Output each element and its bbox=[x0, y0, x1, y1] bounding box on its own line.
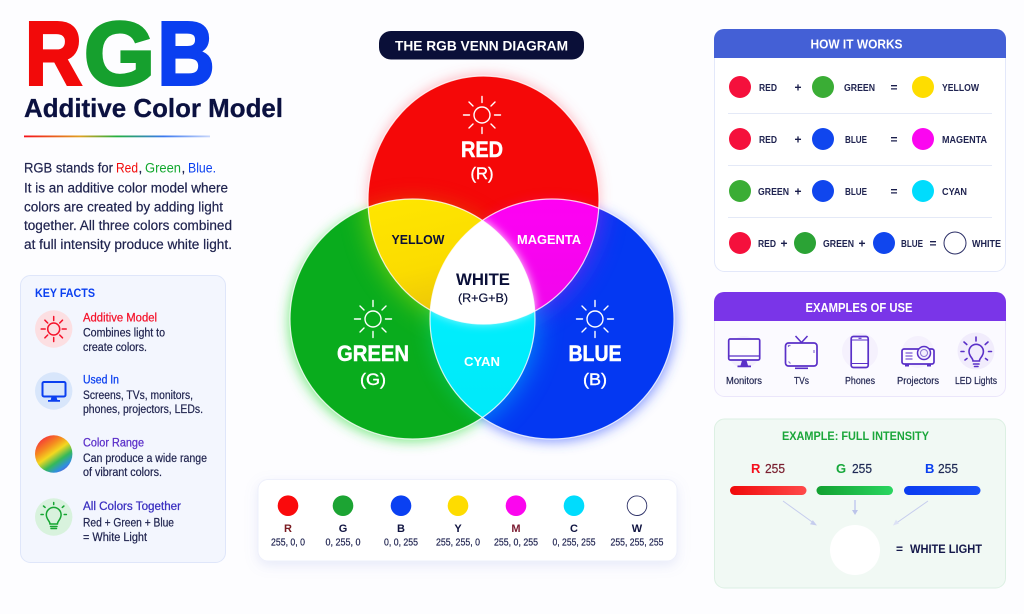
value: red 255 bbox=[751, 461, 785, 476]
row: red plus green: YELLOW bbox=[942, 82, 979, 94]
icon: sun red bbox=[464, 96, 500, 134]
label: red: RED bbox=[461, 137, 503, 162]
row: red plus blue: + bbox=[794, 132, 802, 146]
bar: green bbox=[816, 486, 893, 495]
panel: key facts bbox=[20, 276, 226, 562]
panel: examples of use bbox=[714, 292, 1006, 396]
row: red plus green: RED bbox=[759, 82, 777, 94]
bar: blue bbox=[904, 486, 980, 495]
label: green bbox=[337, 341, 409, 389]
arrows to white light bbox=[783, 500, 928, 526]
fact: all colors together: = White Light bbox=[83, 532, 148, 544]
label: red: (R) bbox=[470, 164, 494, 183]
row: red plus green plus blue: BLUE bbox=[901, 238, 923, 250]
example: monitors: Monitors bbox=[726, 375, 762, 387]
overlap: white bbox=[430, 221, 534, 324]
panel: example full intensity bbox=[714, 419, 1006, 588]
fact: used in bbox=[35, 372, 203, 416]
subtitle: Additive Color Model bbox=[24, 93, 283, 123]
label: magenta: MAGENTA bbox=[517, 233, 581, 247]
legend: blue bbox=[384, 495, 418, 548]
fact: additive model: create colors. bbox=[83, 342, 147, 354]
label: green: GREEN bbox=[337, 341, 409, 366]
bar: red bbox=[730, 486, 806, 495]
icon: sun blue bbox=[576, 300, 614, 338]
header: how it works bbox=[714, 29, 1006, 58]
label: white light: = bbox=[896, 542, 903, 556]
row: red plus green plus blue: GREEN bbox=[823, 238, 854, 250]
intro text block: colors are created by adding light bbox=[24, 200, 223, 214]
fact: all colors together bbox=[35, 498, 181, 544]
circle: red bbox=[368, 76, 599, 310]
legend: cyan: C bbox=[570, 523, 578, 535]
row: red plus green: + bbox=[794, 80, 802, 94]
heading: venn diagram pill bbox=[379, 31, 584, 60]
example: LED lights: LED Lights bbox=[955, 375, 997, 387]
legend: green: G bbox=[339, 523, 347, 535]
label: white bbox=[456, 271, 510, 305]
legend: blue: 0, 0, 255 bbox=[384, 538, 418, 548]
title: RGB: B bbox=[158, 4, 214, 104]
example: projectors: Projectors bbox=[897, 375, 939, 387]
value: red 255: 255 bbox=[765, 462, 785, 476]
label: green: (G) bbox=[360, 370, 386, 389]
legend: yellow: 255, 255, 0 bbox=[436, 538, 480, 548]
row: green plus blue bbox=[729, 180, 967, 202]
heading: venn diagram pill: THE RGB VENN DIAGRAM bbox=[395, 38, 568, 54]
header: examples of use bbox=[714, 292, 1006, 321]
label: blue: BLUE bbox=[568, 341, 622, 366]
row: green plus blue: = bbox=[890, 184, 898, 198]
value: blue 255 bbox=[925, 461, 958, 476]
legend: red bbox=[271, 495, 305, 548]
panel: color value legend bbox=[258, 480, 677, 561]
heading: full intensity: EXAMPLE: FULL INTENSITY bbox=[782, 429, 929, 443]
value: green 255 bbox=[836, 461, 872, 476]
row: red plus green: GREEN bbox=[844, 82, 875, 94]
legend: white bbox=[610, 496, 664, 548]
row: green plus blue: CYAN bbox=[942, 186, 967, 198]
value: green 255: G bbox=[836, 461, 846, 476]
title: RGB: G bbox=[84, 4, 155, 104]
label: white light: WHITE LIGHT bbox=[910, 542, 983, 556]
fact: additive model: Combines light to bbox=[83, 328, 165, 340]
legend: white: W bbox=[632, 523, 643, 535]
intro text block: together. All three colors combined bbox=[24, 218, 232, 233]
row: red plus blue: = bbox=[890, 132, 898, 146]
legend: red: 255, 0, 0 bbox=[271, 538, 305, 548]
overlap: yellow bbox=[368, 199, 482, 310]
fact: all colors together: Red + Green + Blue bbox=[83, 518, 174, 530]
legend: white: 255, 255, 255 bbox=[610, 538, 664, 548]
venn diagram bbox=[280, 70, 680, 450]
row: green plus blue: + bbox=[794, 184, 802, 198]
row: red plus green plus blue bbox=[729, 232, 1001, 254]
value: green 255: 255 bbox=[852, 462, 872, 476]
fact: color range bbox=[35, 435, 207, 479]
header: examples of use: EXAMPLES OF USE bbox=[806, 300, 913, 315]
fact: used in: phones, projectors, LEDs. bbox=[83, 404, 203, 416]
fact: all colors together: All Colors Together bbox=[83, 501, 181, 513]
legend: blue: B bbox=[397, 523, 405, 535]
circle: blue bbox=[430, 208, 674, 439]
intro text block: , bbox=[182, 161, 185, 176]
legend: cyan bbox=[552, 495, 596, 548]
intro text block: Green bbox=[145, 161, 181, 176]
intro text block bbox=[24, 161, 232, 252]
circle: green bbox=[290, 208, 482, 439]
intro text block: It is an additive color model where bbox=[24, 180, 228, 196]
intro text block: Red bbox=[116, 161, 138, 176]
row: red plus green bbox=[729, 76, 979, 98]
fact: color range: Can produce a wide range bbox=[83, 453, 207, 465]
overlap: cyan bbox=[430, 270, 535, 417]
row: red plus blue: MAGENTA bbox=[942, 134, 987, 146]
row: red plus blue bbox=[729, 128, 987, 150]
legend: yellow bbox=[436, 495, 480, 548]
row: red plus green: = bbox=[890, 80, 898, 94]
legend: magenta: 255, 0, 255 bbox=[494, 538, 538, 548]
heading: key facts: KEY FACTS bbox=[35, 286, 95, 300]
title: RGB: R bbox=[25, 4, 82, 104]
overlap: magenta bbox=[445, 199, 599, 311]
row: red plus green plus blue: = bbox=[929, 236, 937, 250]
fact: color range: Color Range bbox=[83, 438, 144, 450]
example: TVs: TVs bbox=[794, 375, 809, 387]
example: monitors bbox=[726, 336, 762, 387]
row: red plus green plus blue: WHITE bbox=[972, 238, 1001, 250]
fact: additive model: Additive Model bbox=[83, 313, 157, 325]
legend: red: R bbox=[284, 523, 292, 535]
example: TVs bbox=[786, 336, 817, 387]
legend: green bbox=[326, 495, 361, 548]
intro text block: Blue. bbox=[188, 161, 216, 176]
row: red plus blue: RED bbox=[759, 134, 777, 146]
label: cyan: CYAN bbox=[464, 355, 500, 369]
fact: color range: of vibrant colors. bbox=[83, 467, 162, 479]
legend: yellow: Y bbox=[454, 523, 462, 535]
row: green plus blue: GREEN bbox=[758, 186, 789, 198]
intro text block: , bbox=[138, 161, 142, 176]
fact: used in: Screens, TVs, monitors, bbox=[83, 390, 193, 402]
example: phones: Phones bbox=[845, 375, 875, 387]
header: how it works: HOW IT WORKS bbox=[810, 37, 902, 51]
example: phones bbox=[842, 333, 878, 387]
label: white: WHITE bbox=[456, 271, 510, 289]
label: white: (R+G+B) bbox=[458, 291, 508, 305]
example: projectors bbox=[897, 336, 939, 387]
label: blue bbox=[568, 341, 622, 389]
legend: magenta: M bbox=[511, 523, 521, 535]
title: RGB bbox=[25, 4, 214, 104]
label: blue: (B) bbox=[583, 370, 607, 389]
row: red plus blue: BLUE bbox=[845, 134, 867, 146]
row: red plus green plus blue: + bbox=[858, 236, 866, 250]
intro text block: RGB stands for bbox=[24, 161, 113, 176]
value: red 255: R bbox=[751, 461, 761, 476]
legend: cyan: 0, 255, 255 bbox=[552, 538, 596, 548]
intro text block: at full intensity produce white light. bbox=[24, 237, 232, 252]
label: red bbox=[461, 137, 503, 183]
fact: used in: Used In bbox=[83, 375, 119, 387]
value: blue 255: B bbox=[925, 461, 934, 476]
label: yellow: YELLOW bbox=[392, 233, 445, 247]
row: red plus green plus blue: + bbox=[780, 236, 788, 250]
legend: green: 0, 255, 0 bbox=[326, 538, 361, 548]
row: red plus green plus blue: RED bbox=[758, 238, 776, 250]
fact: additive model bbox=[35, 310, 165, 354]
row: green plus blue: BLUE bbox=[845, 186, 867, 198]
example: LED lights bbox=[955, 332, 997, 387]
panel: how it works bbox=[714, 29, 1006, 272]
circle: white light bbox=[830, 525, 880, 575]
value: blue 255: 255 bbox=[938, 462, 958, 476]
legend: magenta bbox=[494, 495, 538, 548]
icon: sun green bbox=[354, 300, 392, 338]
